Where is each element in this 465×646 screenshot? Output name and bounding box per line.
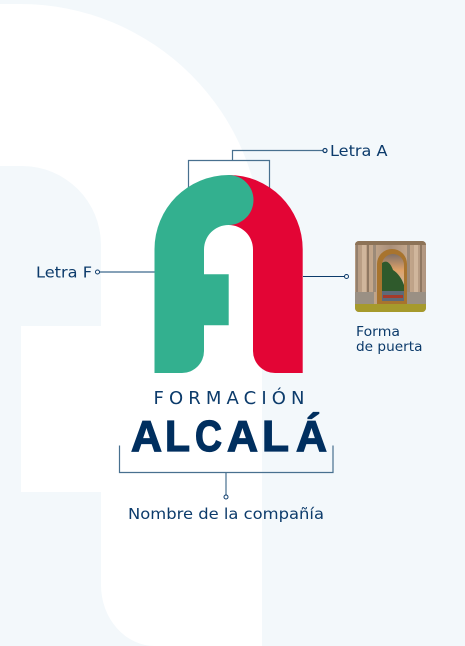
label: Letra F: Letra F [36,264,92,282]
label: Forma de puerta: Forma [356,324,400,340]
label: Forma de puerta: de puerta [356,339,422,355]
connector: Letra F [96,270,154,274]
logo: red letter A [228,175,303,373]
label: Letra A: Letra A [330,142,388,160]
wordmark: ALCALÁ: L [165,412,190,461]
label: Nombre de la compañía: Nombre de la compañía [128,505,324,523]
wordmark: ALCALÁ: Á [296,411,327,461]
connector: door shape [303,274,348,278]
label: Forma de puerta [356,324,422,355]
wordmark: ALCALÁ: A [227,412,258,461]
connector: company name bracket [120,446,333,499]
wordmark: FORMACIÓN: FORMACIÓN [154,387,304,409]
logo: green letter F [154,175,253,373]
logo symbol: FA arch [154,175,303,373]
photo: Puerta de Alcalá arch [355,241,426,312]
wordmark: ALCALÁ: A [131,412,162,461]
wordmark: ALCALÁ: C [195,412,222,461]
connector: Letra A bracket [188,148,327,190]
wordmark: ALCALÁ [131,411,327,461]
background: large white letter F watermark [0,4,262,646]
wordmark: ALCALÁ: L [262,412,289,461]
